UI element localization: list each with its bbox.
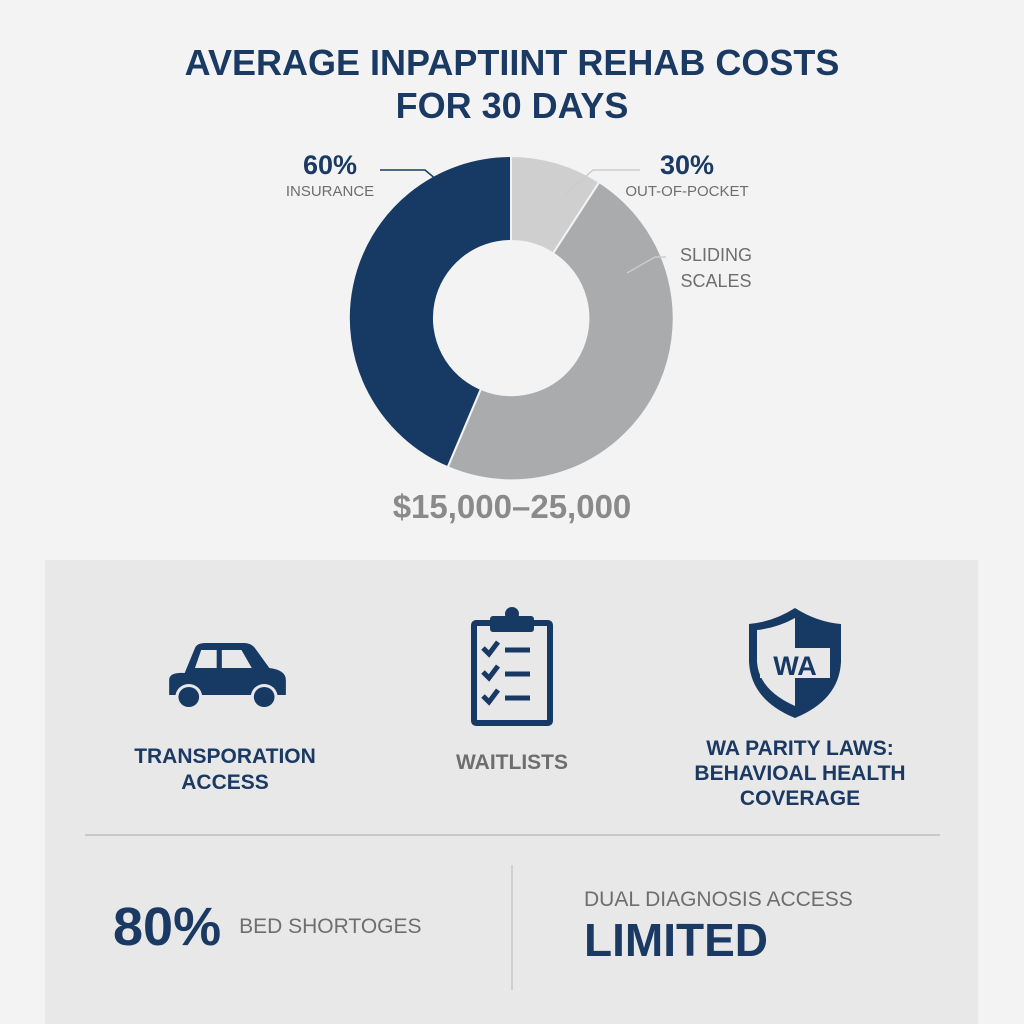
icon: car: [169, 643, 286, 707]
segment: insurance: [349, 156, 511, 467]
title: FOR 30 DAYS: [396, 85, 628, 126]
stat: dual diagnosis: LIMITED: [584, 914, 768, 966]
label: parity laws: [694, 737, 906, 810]
label: out-of-pocket: [625, 150, 749, 200]
segment: out-of-pocket: [511, 156, 599, 253]
label: parity laws: BEHAVIOAL HEALTH: [694, 762, 906, 785]
stat: dual diagnosis: [584, 888, 853, 966]
title: AVERAGE INPAPTIINT REHAB COSTS: [185, 42, 839, 83]
leader: sliding: [627, 257, 666, 273]
label: insurance: INSURANCE: [286, 183, 374, 200]
segment: sliding scales: [448, 182, 674, 480]
icon: clipboard: [471, 607, 553, 726]
label: out-of-pocket: 30%: [660, 150, 714, 180]
leader: out-of-pocket: [565, 170, 640, 195]
icon: WA shield: [749, 608, 841, 718]
leader: insurance: [380, 170, 455, 195]
panel: barriers: [45, 560, 978, 1024]
icon: WA shield: WA: [773, 651, 817, 681]
label: parity laws: COVERAGE: [740, 787, 860, 810]
stat: dual diagnosis: DUAL DIAGNOSIS ACCESS: [584, 888, 853, 911]
label: waitlists: WAITLISTS: [456, 751, 568, 774]
label: transportation: ACCESS: [181, 771, 269, 794]
label: insurance: 60%: [303, 150, 357, 180]
label: transportation: TRANSPORATION: [134, 745, 316, 768]
label: sliding scales: [680, 245, 752, 291]
donut chart: [350, 157, 673, 480]
label: parity laws: WA PARITY LAWS:: [706, 737, 894, 760]
cost range: $15,000–25,000: [393, 488, 631, 525]
label: out-of-pocket: OUT-OF-POCKET: [625, 183, 749, 200]
label: transportation: [134, 745, 316, 794]
label: sliding scales: SLIDING: [680, 245, 752, 265]
title: [185, 42, 839, 126]
label: insurance: [286, 150, 374, 200]
label: sliding scales: SCALES: [680, 271, 752, 291]
stat: bed shortages: 80% BED SHORTOGES: [113, 897, 422, 957]
